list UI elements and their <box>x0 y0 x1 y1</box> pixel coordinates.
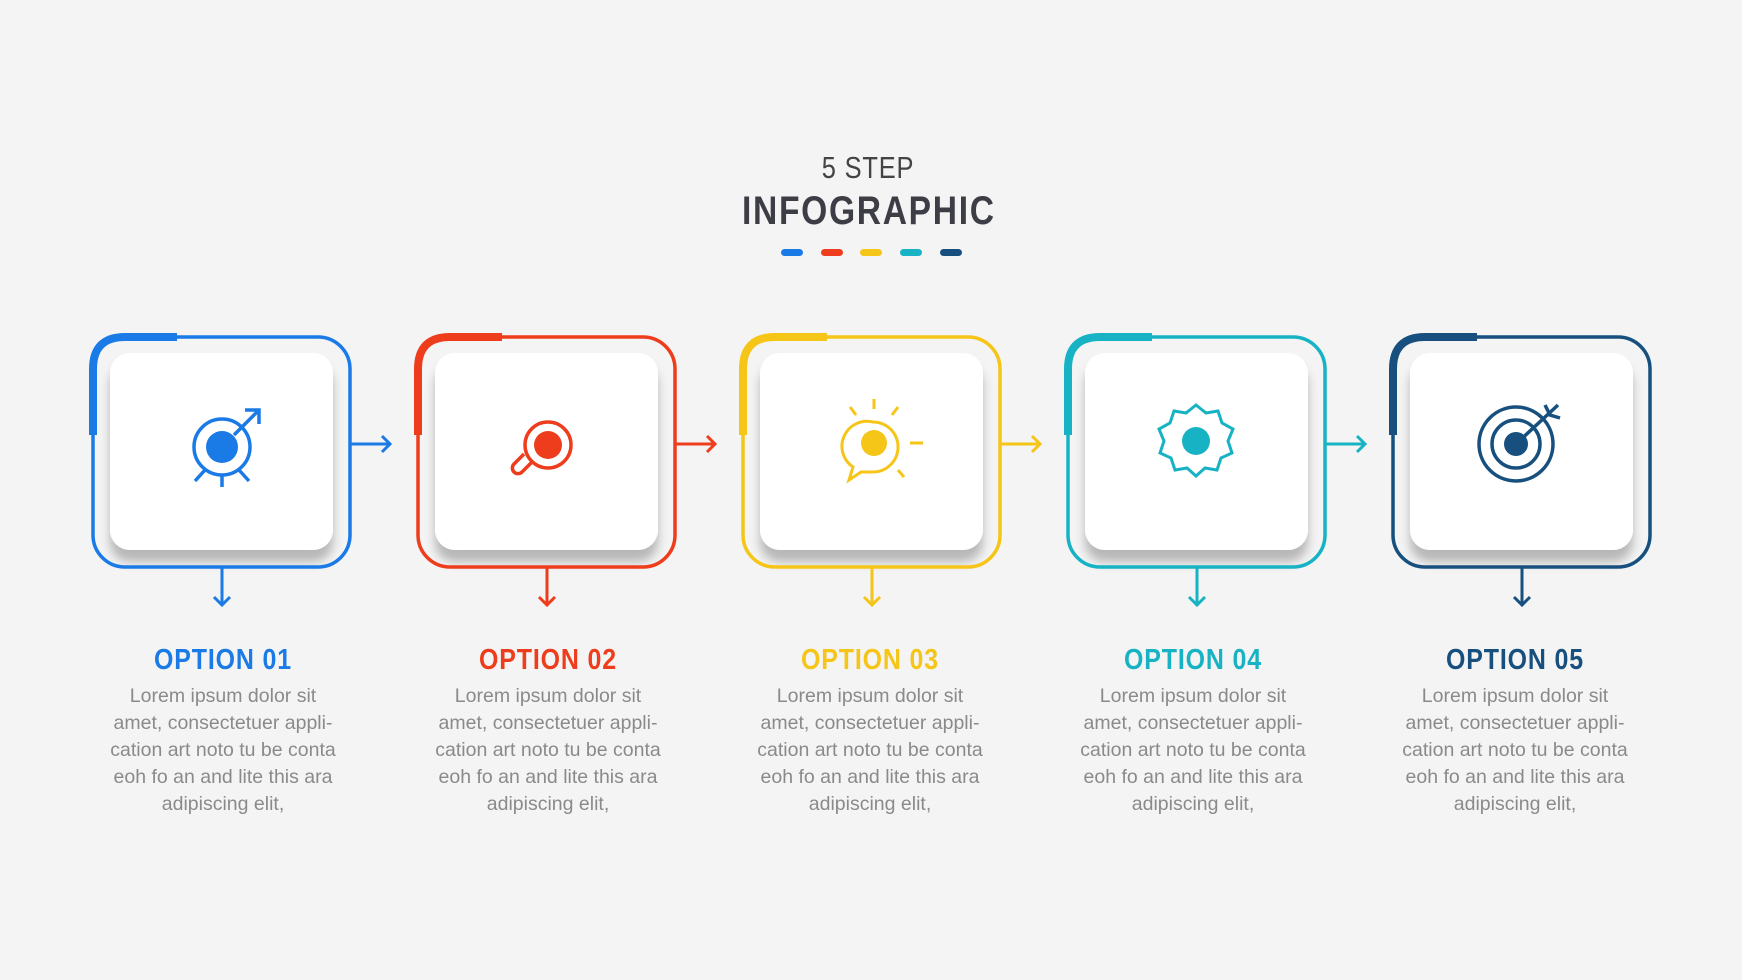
option 4 text: Lorem ipsum dolor sit <box>1100 685 1286 707</box>
option 5 text: OPTION 05 <box>1446 644 1584 676</box>
steps diagram <box>89 333 1652 608</box>
option 2 text: amet, consectetuer appli- <box>439 712 657 734</box>
option 1 text: amet, consectetuer appli- <box>114 712 332 734</box>
icon: magnifier <box>512 422 571 474</box>
option 4 text: cation art noto tu be conta <box>1080 739 1306 761</box>
step 5 box <box>1393 337 1650 605</box>
option 5 text: cation art noto tu be conta <box>1402 739 1628 761</box>
step 3 box <box>743 337 1040 605</box>
option 1 text: adipiscing elit, <box>162 793 284 815</box>
icon: target person <box>194 410 259 487</box>
color dashes <box>781 249 962 256</box>
option 1 text: OPTION 01 <box>154 644 292 676</box>
icon: gear <box>1159 405 1233 476</box>
option 1 text: cation art noto tu be conta <box>110 739 336 761</box>
option 3 text: OPTION 03 <box>801 644 939 676</box>
option 1 text <box>110 644 336 815</box>
step 1 box <box>93 337 390 605</box>
option 4 text: OPTION 04 <box>1124 644 1262 676</box>
option 4 text: amet, consectetuer appli- <box>1084 712 1302 734</box>
title: 5 STEP: 5 STEP <box>822 150 914 185</box>
step 4 box <box>1068 337 1365 605</box>
option 4 text: eoh fo an and lite this ara <box>1084 766 1302 788</box>
option 3 text: eoh fo an and lite this ara <box>760 766 980 788</box>
option 3 text: amet, consectetuer appli- <box>761 712 979 734</box>
icon: bulb <box>842 399 923 480</box>
option 3 text: cation art noto tu be conta <box>757 739 983 761</box>
option 1 text: Lorem ipsum dolor sit <box>130 685 316 707</box>
title: INFOGRAPHIC: INFOGRAPHIC <box>742 189 996 233</box>
option 3 text <box>757 644 983 815</box>
option 5 text <box>1402 644 1628 815</box>
option 2 text: OPTION 02 <box>479 644 617 676</box>
option 2 text <box>435 644 661 815</box>
step 2 box <box>418 337 715 605</box>
option 3 text: Lorem ipsum dolor sit <box>777 685 963 707</box>
icon: target <box>1479 405 1560 481</box>
option 5 text: eoh fo an and lite this ara <box>1406 766 1624 788</box>
option 4 text: adipiscing elit, <box>1132 793 1254 815</box>
option 5 text: amet, consectetuer appli- <box>1406 712 1624 734</box>
option 2 text: eoh fo an and lite this ara <box>438 766 658 788</box>
option 1 text: eoh fo an and lite this ara <box>114 766 332 788</box>
option 4 text <box>1080 644 1306 815</box>
option 2 text: cation art noto tu be conta <box>435 739 661 761</box>
option 2 text: Lorem ipsum dolor sit <box>455 685 641 707</box>
option 3 text: adipiscing elit, <box>809 793 931 815</box>
option 2 text: adipiscing elit, <box>487 793 609 815</box>
option 5 text: adipiscing elit, <box>1454 793 1576 815</box>
option 5 text: Lorem ipsum dolor sit <box>1422 685 1608 707</box>
